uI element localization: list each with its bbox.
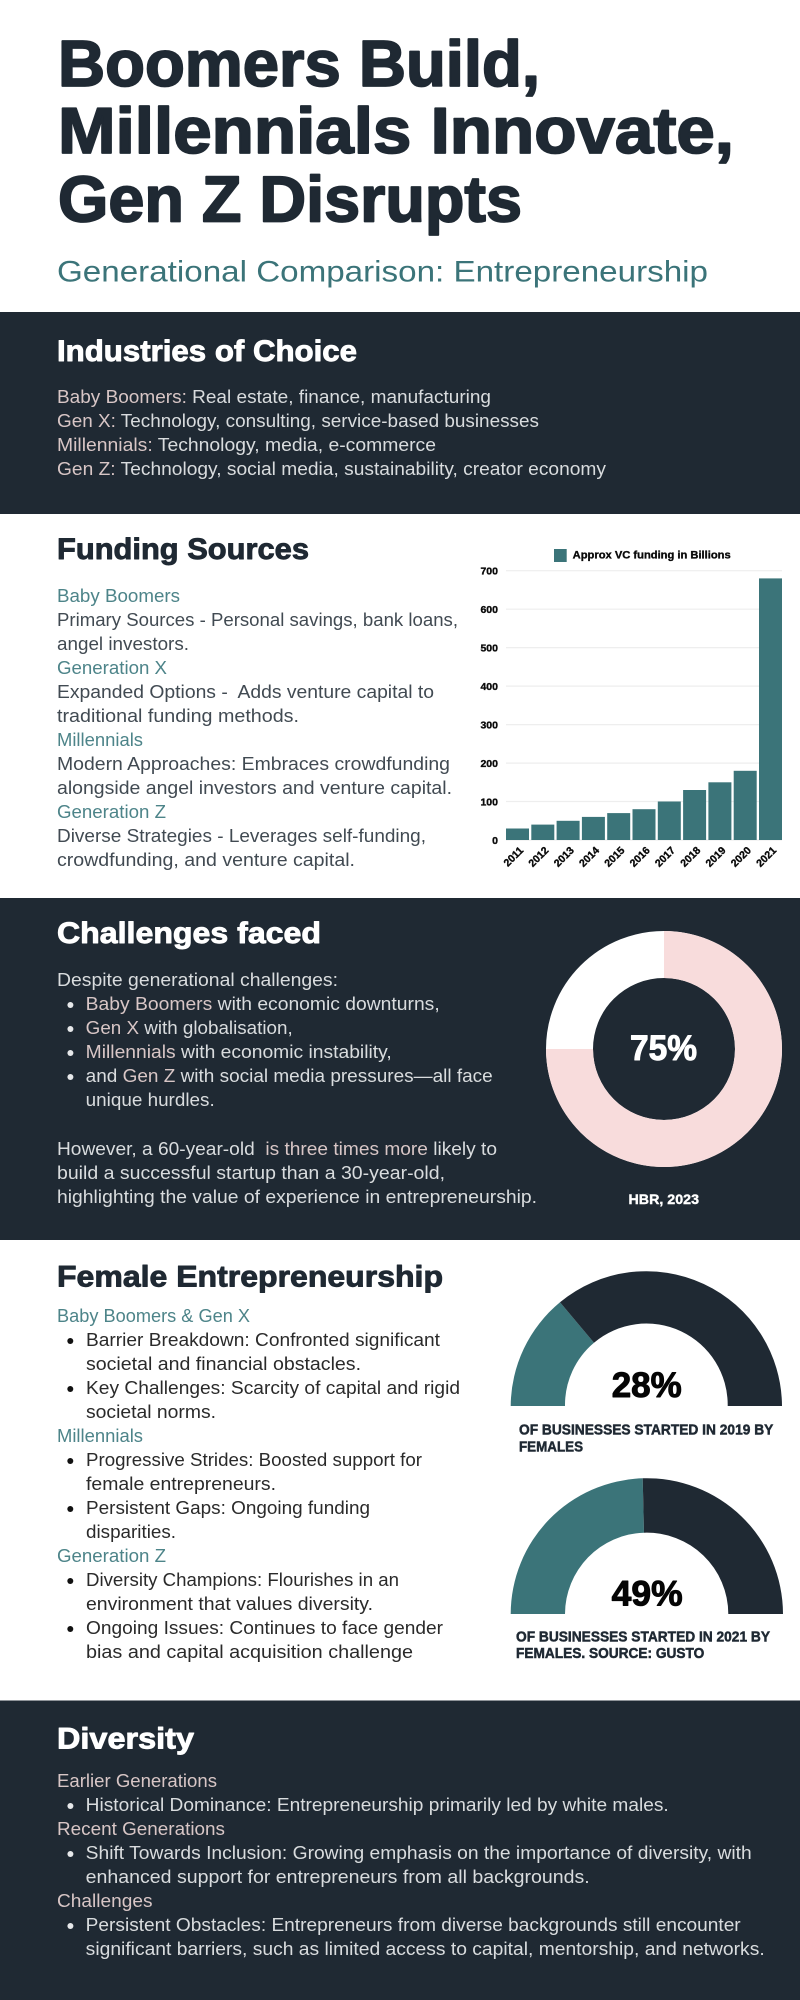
text block: diversity by era: Earlier Generations — [57, 1770, 217, 1791]
gauge caption: 2021 — [516, 1629, 770, 1662]
title: Millennials Innovate, — [58, 94, 734, 167]
y axis labels: 300 — [480, 720, 498, 732]
text block: female entrepreneurship by generation: disparities. — [86, 1521, 176, 1542]
bars — [506, 578, 782, 840]
text block: experience note — [57, 1138, 537, 1207]
x axis labels: 2017 — [653, 845, 678, 870]
text block: diversity by era — [57, 1770, 765, 1959]
text block: funding by generation — [57, 585, 458, 870]
text block: funding by generation: Generation Z — [57, 801, 166, 822]
heading: diversity: Diversity — [57, 1722, 194, 1755]
text block: industries by generation: Millennials: Technology, media, e-commerce — [57, 434, 436, 455]
donut source: HBR, 2023 — [628, 1191, 699, 1207]
text block: challenges list: Baby Boomers with economic downturns, — [86, 993, 440, 1014]
text block: diversity by era: enhanced support for entrepreneurs from all backgrounds. — [86, 1866, 590, 1887]
y axis labels: 400 — [480, 681, 498, 693]
panel: challenges faced — [0, 898, 800, 1240]
text block: female entrepreneurship by generation: Ongoing Issues: Continues to face gender — [86, 1617, 443, 1638]
text block: diversity by era: Shift Towards Inclusion: Growing emphasis on the importance of diversity, with — [86, 1842, 752, 1863]
text block: diversity by era: Challenges — [57, 1890, 152, 1911]
bar chart: approx VC funding in billions — [480, 549, 782, 870]
text block: diversity by era: Historical Dominance: Entrepreneurship primarily led by white males. — [86, 1794, 669, 1815]
text block: female entrepreneurship by generation: Progressive Strides: Boosted support for — [86, 1449, 422, 1470]
gauge caption: 2021: OF BUSINESSES STARTED IN 2021 BY — [516, 1629, 770, 1645]
panel: industries of choice — [0, 312, 800, 514]
text block: female entrepreneurship by generation: Baby Boomers & Gen X — [57, 1305, 250, 1326]
text block: experience note: However, a 60-year-old is three times more likely to — [57, 1138, 497, 1159]
x axis labels: 2015 — [602, 845, 627, 870]
text block: industries by generation: Gen X: Technology, consulting, service-based businesses — [57, 410, 539, 431]
title: Gen Z Disrupts — [58, 162, 522, 236]
text block: female entrepreneurship by generation: Key Challenges: Scarcity of capital and rigid — [86, 1377, 460, 1398]
text block: funding by generation: Generation X — [57, 657, 167, 678]
text block: diversity by era: significant barriers, such as limited access to capital, mentorship, and networks. — [86, 1938, 765, 1959]
text block: experience note: build a successful startup than a 30-year-old, — [57, 1162, 445, 1183]
text block: challenges list — [57, 969, 493, 1110]
donut chart: 75% — [546, 931, 782, 1167]
y axis labels: 100 — [480, 796, 498, 808]
gauge value: 28%: 28% — [612, 1366, 682, 1405]
title: Boomers Build, — [58, 27, 540, 100]
heading: industries of choice: Industries of Choice — [57, 335, 357, 368]
text block: funding by generation: traditional funding methods. — [57, 705, 299, 726]
text block: female entrepreneurship by generation: Persistent Gaps: Ongoing funding — [86, 1497, 370, 1518]
gauge chart: 28% in 2019 — [511, 1271, 782, 1406]
chart legend: Approx VC funding in Billions — [573, 550, 731, 562]
text block: funding by generation: Modern Approaches: Embraces crowdfunding — [57, 753, 450, 774]
gauge chart: 49% in 2021 — [511, 1478, 783, 1614]
text block: industries by generation: Baby Boomers: Real estate, finance, manufacturing — [57, 386, 491, 407]
text block: diversity by era: Recent Generations — [57, 1818, 225, 1839]
text block: challenges list: Gen X with globalisation, — [86, 1017, 293, 1038]
x axis labels: 2020 — [729, 845, 754, 870]
x axis labels: 2011 — [502, 845, 526, 869]
x axis labels: 2021 — [754, 845, 779, 870]
title — [58, 27, 734, 236]
text block: female entrepreneurship by generation: societal norms. — [86, 1401, 216, 1422]
text block: funding by generation: Expanded Options - Adds venture capital to — [57, 681, 434, 702]
text block: female entrepreneurship by generation: female entrepreneurs. — [86, 1473, 276, 1494]
text block: challenges list: unique hurdles. — [86, 1089, 215, 1110]
text block: experience note: highlighting the value of experience in entrepreneurship. — [57, 1186, 537, 1207]
gauge value: 49%: 49% — [612, 1574, 683, 1614]
x axis labels: 2018 — [678, 845, 703, 870]
text block: challenges list: Despite generational challenges: — [57, 969, 338, 990]
heading: challenges faced: Challenges faced — [57, 917, 321, 950]
text block: challenges list: Millennials with economic instability, — [86, 1041, 392, 1062]
text block: female entrepreneurship by generation: Millennials — [57, 1425, 143, 1446]
gauge caption: 2019 — [519, 1422, 774, 1455]
x axis labels — [502, 845, 779, 870]
text block: female entrepreneurship by generation: bias and capital acquisition challenge — [86, 1641, 413, 1662]
panel: diversity — [0, 1700, 800, 2000]
text block: funding by generation: alongside angel investors and venture capital. — [57, 777, 452, 798]
heading: female entrepreneurship: Female Entrepreneurship — [57, 1260, 443, 1294]
text block: industries by generation: Gen Z: Technology, social media, sustainability, creator economy — [57, 458, 607, 479]
gauge caption: 2019: FEMALES — [519, 1439, 583, 1455]
text block: female entrepreneurship by generation — [57, 1305, 460, 1662]
y axis labels: 700 — [480, 566, 498, 578]
x axis labels: 2019 — [704, 845, 729, 870]
text block: female entrepreneurship by generation: societal and financial obstacles. — [86, 1353, 361, 1374]
y axis labels: 600 — [480, 604, 498, 616]
text block: female entrepreneurship by generation: Diversity Champions: Flourishes in an — [86, 1569, 399, 1590]
y axis labels: 200 — [480, 758, 498, 770]
gauge caption: 2019: OF BUSINESSES STARTED IN 2019 BY — [519, 1422, 774, 1438]
text block: diversity by era: Persistent Obstacles: Entrepreneurs from diverse backgrounds still encounter — [86, 1914, 741, 1935]
text block: funding by generation: Millennials — [57, 729, 143, 750]
y axis labels — [480, 566, 498, 847]
text block: funding by generation: crowdfunding, and venture capital. — [57, 849, 355, 870]
text block: challenges list: and Gen Z with social media pressures—all face — [86, 1065, 493, 1086]
text block: funding by generation: angel investors. — [57, 633, 189, 654]
text block: funding by generation: Diverse Strategies - Leverages self-funding, — [57, 825, 426, 846]
y axis labels: 0 — [492, 835, 498, 847]
heading: funding sources: Funding Sources — [57, 533, 309, 566]
panel: funding sources — [57, 533, 782, 870]
y axis labels: 500 — [480, 643, 498, 655]
text block: funding by generation: Primary Sources - Personal savings, bank loans, — [57, 609, 458, 630]
x axis labels: 2016 — [628, 845, 653, 870]
text block: industries by generation — [57, 386, 607, 479]
x axis labels: 2013 — [552, 845, 577, 870]
donut value: 75% — [630, 1029, 697, 1068]
text block: female entrepreneurship by generation: Generation Z — [57, 1545, 166, 1566]
text block: female entrepreneurship by generation: Barrier Breakdown: Confronted significant — [86, 1329, 440, 1350]
panel: header — [57, 27, 734, 288]
subtitle: Generational Comparison: Entrepreneurship — [57, 256, 708, 288]
text block: funding by generation: Baby Boomers — [57, 585, 180, 606]
panel: female entrepreneurship — [57, 1260, 783, 1662]
gauge caption: 2021: FEMALES. SOURCE: GUSTO — [516, 1646, 704, 1662]
x axis labels: 2012 — [526, 845, 552, 870]
x axis labels: 2014 — [577, 845, 602, 870]
text block: female entrepreneurship by generation: environment that values diversity. — [86, 1593, 373, 1614]
